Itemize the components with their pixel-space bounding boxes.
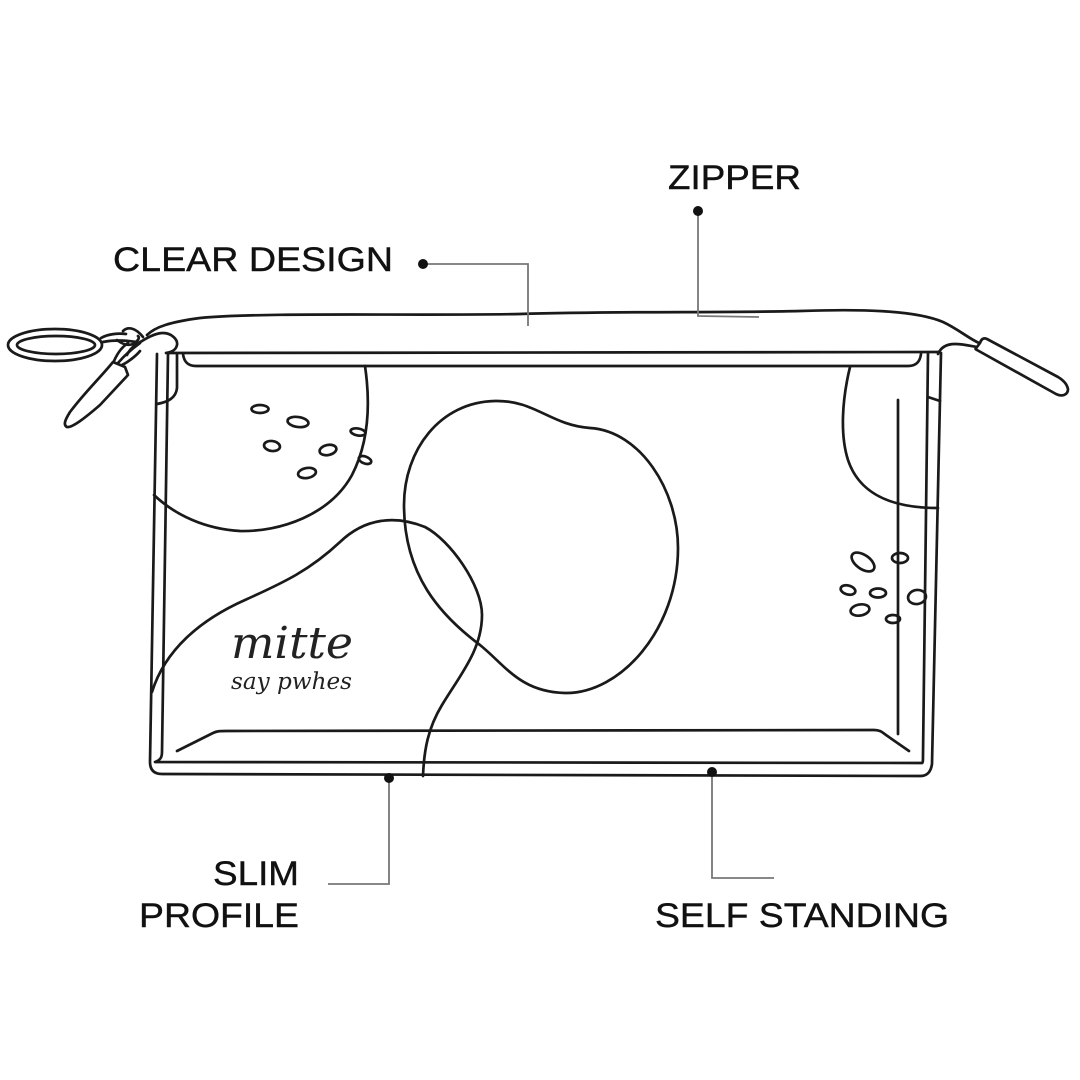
seeds right: [840, 549, 927, 623]
dot: clear design: [418, 259, 428, 269]
seeds left: [252, 405, 372, 479]
dot: zipper: [693, 206, 703, 216]
label: clear design: CLEAR DESIGN: [113, 241, 393, 279]
callout: slim profile: [139, 773, 394, 935]
body outer wall: [150, 353, 941, 776]
callout: zipper: [668, 159, 801, 317]
right inner flap: [928, 397, 940, 401]
dot: self standing: [707, 767, 717, 777]
pouch illustration: [8, 310, 1068, 776]
brand name: mitte: [231, 618, 353, 669]
left zipper ring inner: [17, 336, 95, 354]
right blob: [843, 367, 938, 508]
callout: clear design: [113, 241, 528, 326]
body inner wall: [155, 353, 928, 763]
callout: self standing: [655, 767, 949, 935]
left inner flap: [157, 354, 177, 404]
center blob: [404, 401, 678, 693]
leader line: slim profile: [328, 778, 389, 884]
brand tagline: say pwhes: [231, 669, 352, 695]
left zipper ring outer: [8, 329, 102, 361]
leader line: self standing: [712, 772, 774, 878]
dot: slim profile: [384, 773, 394, 783]
label: profile: PROFILE: [139, 897, 299, 935]
label: slim: SLIM: [213, 855, 299, 893]
right zipper tab: [938, 338, 1068, 395]
label: self standing: SELF STANDING: [655, 897, 949, 935]
wave blob: [152, 520, 482, 776]
left blob: [154, 366, 368, 531]
leader line: zipper: [698, 211, 759, 317]
bottom inner fold: [177, 730, 909, 751]
inner top rim: [183, 354, 921, 366]
left zipper pull strands: [101, 328, 143, 365]
leader line: clear design: [423, 264, 528, 326]
brand logo: [231, 618, 353, 695]
zipper band: [127, 310, 979, 355]
right inner vertical line: [897, 400, 899, 734]
label: zipper: ZIPPER: [668, 159, 801, 197]
left zipper pull: [65, 362, 128, 427]
